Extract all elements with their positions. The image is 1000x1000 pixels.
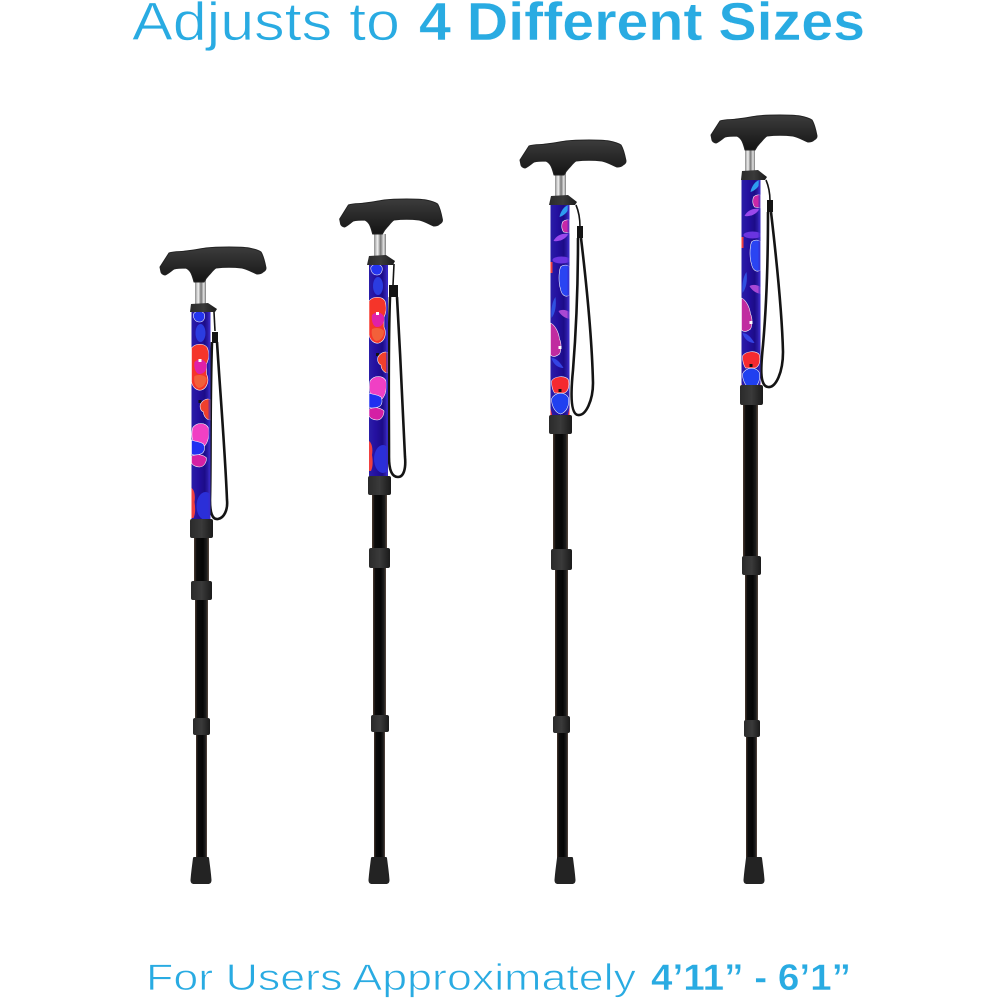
wrist strap (210, 312, 227, 519)
wrist strap (761, 180, 783, 387)
footer caption (146, 957, 851, 998)
stem (195, 278, 206, 305)
handle (520, 140, 626, 175)
lower shaft (743, 403, 758, 859)
cane 3: third setting (520, 140, 626, 884)
rubber tip (554, 857, 576, 884)
title (132, 0, 865, 52)
lower shaft (553, 432, 568, 859)
handle (711, 115, 817, 150)
collars (367, 255, 395, 732)
stem (374, 234, 386, 257)
handle (340, 199, 442, 234)
handle (160, 247, 266, 282)
wrist strap (572, 205, 593, 415)
footer caption: 4’11” - 6’1” (651, 957, 851, 998)
rubber tip (744, 857, 764, 884)
cane 2: second setting (340, 199, 442, 884)
patterned tube (742, 180, 762, 396)
wrist strap (389, 264, 405, 477)
footer caption: For Users Approximately (146, 957, 637, 998)
cane 4: tallest setting (711, 115, 817, 884)
lower shaft (194, 536, 209, 859)
stem (555, 173, 566, 197)
rubber tip (190, 857, 212, 884)
collars (549, 195, 577, 733)
lower shaft (372, 493, 387, 859)
patterned tube (550, 205, 570, 421)
patterned tube (192, 311, 214, 528)
patterned tube (369, 264, 392, 481)
stem (745, 148, 755, 172)
cane 1: shortest setting (160, 247, 266, 884)
collars (190, 303, 217, 735)
rubber tip (368, 857, 390, 884)
collars (740, 170, 767, 737)
